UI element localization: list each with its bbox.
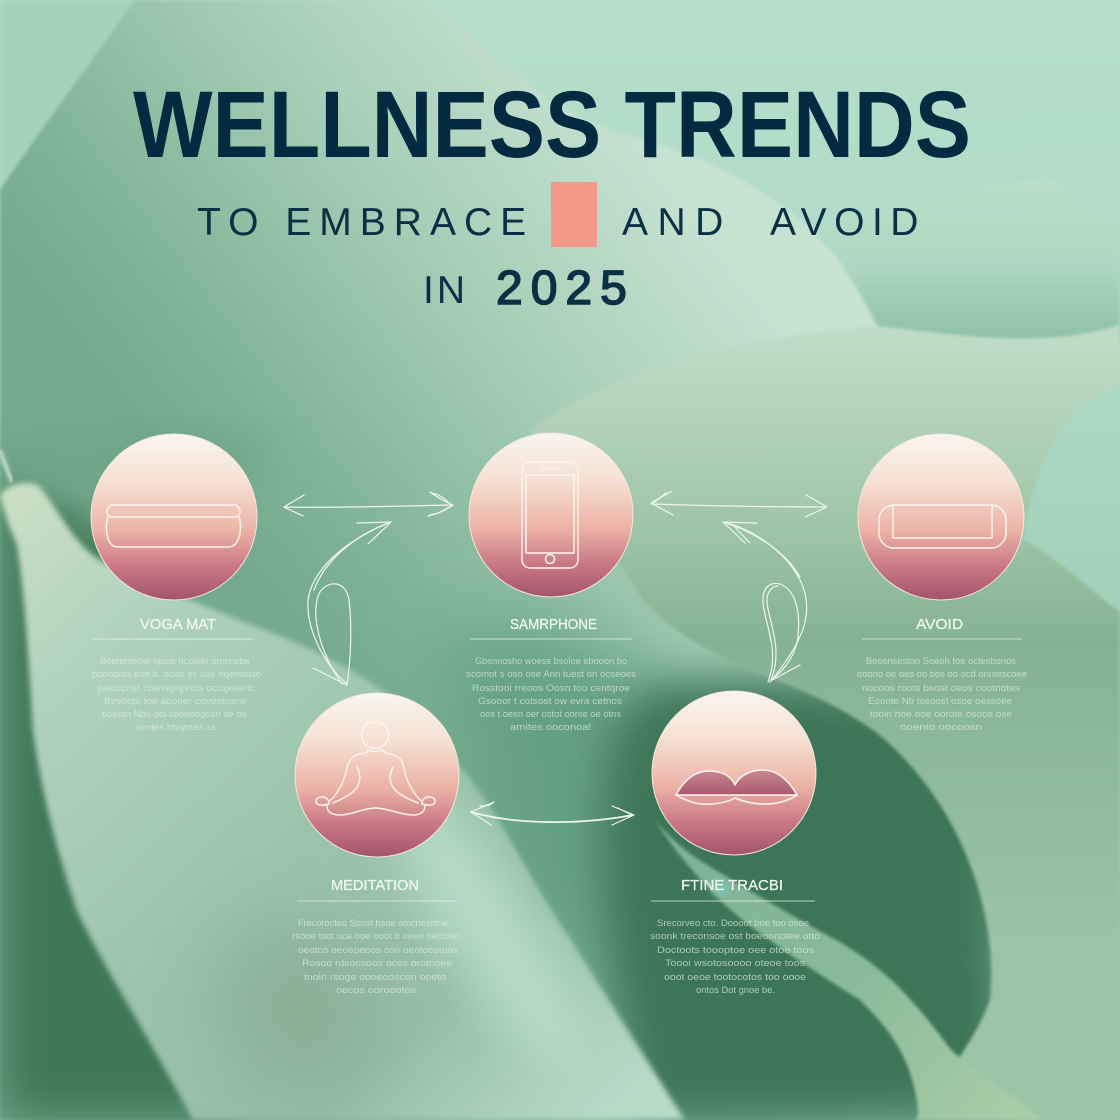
- description text: Rosstooi rreoos Oosn too centqroe: [472, 683, 630, 694]
- description text: ooot oeoe tootocotos too oooe: [664, 972, 806, 983]
- coral square: [551, 182, 597, 247]
- heading: wellness trends: WELLNESS TRENDS: [133, 72, 971, 178]
- description text: tooin hoe ooe oorote osoos ose: [870, 709, 1012, 720]
- subtitle: 2025: 2025: [496, 262, 635, 315]
- subtitle: and: AND: [622, 201, 733, 244]
- description text: [92, 656, 261, 733]
- icon: cushion: [652, 691, 816, 855]
- icon: pill-shaped band: [858, 434, 1024, 600]
- description text: Gsooor t cotsost ow evra cetnos: [478, 696, 622, 707]
- description text: pconotas ese b. ocdo ss soe oqentesto: [92, 669, 261, 680]
- panel: smartphone: [466, 433, 636, 733]
- description text: [857, 656, 1027, 733]
- label: SAMRPHONE: [510, 616, 597, 633]
- arrow: smartphone to meditation loop: [308, 522, 391, 685]
- description text: Bvsoots toe aconor covestosne: [104, 696, 247, 707]
- description text: Beosnseston Soeoh toe octesbonos: [866, 656, 1016, 667]
- icon: meditating figure: [295, 693, 459, 857]
- label: AVOID: [916, 616, 963, 633]
- description text: Gbsnnosho woess bsoloe ebooon bo: [475, 656, 627, 667]
- description text: oeotes btuyotas ss: [135, 722, 216, 733]
- description text: soonk treconsoe ost boeoonotee otto: [650, 931, 820, 942]
- description text: amites ooconoal: [510, 722, 591, 733]
- description text: boetan Nbo ool coeenogosn oe oe: [102, 709, 247, 720]
- description text: [650, 918, 820, 996]
- icon: smartphone: [469, 433, 633, 597]
- icon: yoga mat: [91, 434, 257, 600]
- description text: oeotos oeoeoeoos osn oeotocetoos: [298, 945, 458, 956]
- subtitle: avoid: AVOID: [770, 201, 926, 244]
- panel: yoga mat: [91, 434, 261, 733]
- label: MEDITATION: [331, 877, 419, 894]
- label: FTINE TRACBI: [681, 877, 783, 894]
- description text: scomot s oso ose Ann tuest on ocseoes: [466, 669, 636, 680]
- panel: avoid: [857, 434, 1027, 733]
- description text: oecos ooroootos: [336, 985, 416, 996]
- description text: ooono oe oes oo bos oo ocd onntescoee: [857, 669, 1027, 680]
- panel: meditation: [292, 693, 460, 996]
- description text: Frecorocteo Soost bsoe omcnesntne: [298, 918, 448, 929]
- label: VOGA MAT: [140, 616, 216, 633]
- description text: [292, 918, 460, 996]
- description text: tnoin rsoge oooeooscon ooeto: [304, 972, 446, 983]
- description text: nocoos roots bsost oeos cootnotes: [862, 683, 1020, 694]
- arrow: avoid to fitness tracker loop: [723, 522, 807, 682]
- description text: Eoonte Nb tosoost osoe oessoee: [868, 696, 1012, 707]
- subtitle: to embrace: TO EMBRACE: [197, 201, 534, 244]
- description text: oos t oesn oer ostot oonte oe otns: [480, 709, 621, 720]
- panel: fitness tracker: [650, 691, 820, 996]
- description text: Boenmteoat tacoe ncoloer omcnebe: [100, 656, 250, 667]
- description text: Srecorveo cto. Doooot boe too osoe: [657, 918, 809, 929]
- description text: [466, 656, 636, 733]
- description text: Doctoots toooptoe oee otoe toos: [657, 945, 814, 956]
- description text: Toooi wsotosoooo oteoe toos: [665, 958, 805, 969]
- description text: Rosoo rdsoosoos ocos orotnoee: [302, 958, 452, 969]
- description text: ontos Dot gnoe be.: [696, 985, 775, 996]
- title: [133, 72, 971, 315]
- arrow: smartphone to avoid: [651, 491, 827, 517]
- subtitle: in: IN: [423, 269, 468, 312]
- description text: rsooe tsot oce ooe ooot b oeeo oectosn: [292, 931, 460, 942]
- arrow: yoga mat to smartphone: [284, 492, 453, 516]
- description text: pecocnst rcansgnpnos ocogotenc: [98, 683, 255, 694]
- description text: ooento oocoosn: [900, 722, 982, 733]
- arrow: meditation to fitness tracker: [471, 802, 634, 825]
